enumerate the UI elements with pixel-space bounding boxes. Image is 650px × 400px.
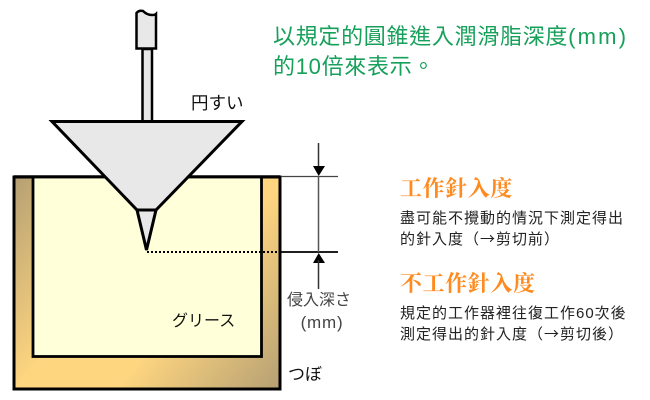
text: unworked penetration description <box>400 305 627 344</box>
text: worked penetration description: 的針入度（→剪切前） <box>400 228 560 249</box>
heading: unworked penetration: 不工作針入度 <box>400 271 536 296</box>
label: tsubo: つぼ <box>288 365 322 384</box>
label: penetration depth: (mm) <box>301 313 343 332</box>
label: penetration depth: 侵入深さ <box>287 292 351 309</box>
rod with holder <box>136 11 156 122</box>
heading: green description: 以規定的圓錐進入潤滑脂深度(mm) <box>273 24 628 49</box>
dimension lines and arrows <box>281 143 338 289</box>
label: cone: 円すい <box>191 93 244 113</box>
text: worked penetration description <box>400 210 624 249</box>
cup wall (tsubo) <box>14 176 280 389</box>
penetration dotted line <box>147 251 280 253</box>
heading: worked penetration: 工作針入度 <box>400 176 513 201</box>
cone <box>52 122 242 250</box>
text: unworked penetration description: 測定得出的針入度（→剪切後） <box>400 323 624 344</box>
label: grease: グリース <box>172 313 235 330</box>
label: penetration depth <box>287 292 351 332</box>
heading: green description: 的10倍來表示。 <box>273 54 435 79</box>
text: unworked penetration description: 規定的工作器裡往復工作60次後 <box>400 305 627 322</box>
heading: green description <box>273 24 628 79</box>
text: worked penetration description: 盡可能不攪動的情況下測定得出 <box>400 210 624 227</box>
